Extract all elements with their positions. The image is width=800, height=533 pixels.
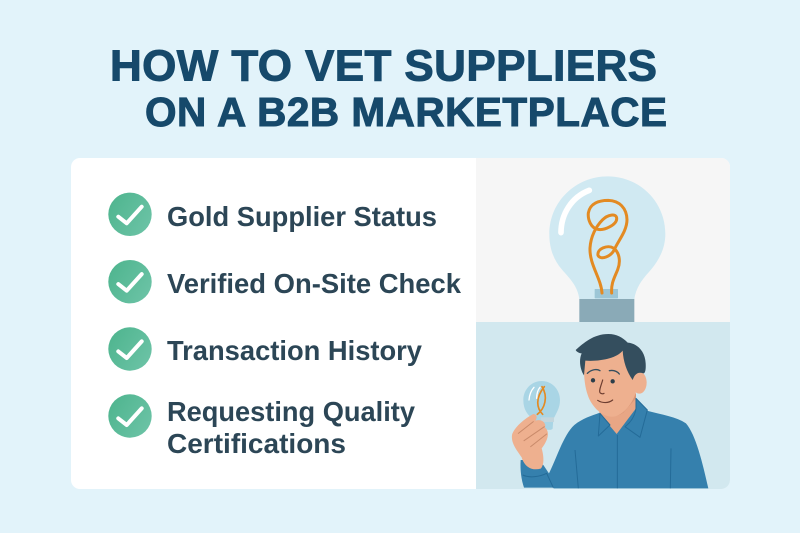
panel: person holding bulb illustration xyxy=(476,322,730,489)
item: requesting quality certifications: Requesting Quality xyxy=(167,396,415,427)
item: transaction history xyxy=(108,327,422,371)
title xyxy=(110,42,667,135)
item: verified on-site check: Verified On-Site Check xyxy=(167,268,461,299)
person: head xyxy=(576,334,647,437)
panel: light bulb illustration xyxy=(476,158,730,323)
item: requesting quality certifications: Certifications xyxy=(167,428,346,459)
item: gold supplier status xyxy=(108,193,437,236)
item: verified on-site check xyxy=(108,260,461,303)
title: ON A B2B MARKETPLACE xyxy=(145,89,667,135)
title: HOW TO VET SUPPLIERS xyxy=(110,42,657,90)
icon: small light bulb xyxy=(523,381,560,430)
panel: checklist xyxy=(108,193,461,459)
person: hand holding small bulb xyxy=(512,381,560,488)
item: requesting quality certifications xyxy=(108,394,415,459)
item: transaction history: Transaction History xyxy=(167,335,422,366)
item: gold supplier status: Gold Supplier Status xyxy=(167,201,437,232)
panel: checklist and illustrations card xyxy=(71,158,730,489)
person: torso xyxy=(549,398,708,488)
